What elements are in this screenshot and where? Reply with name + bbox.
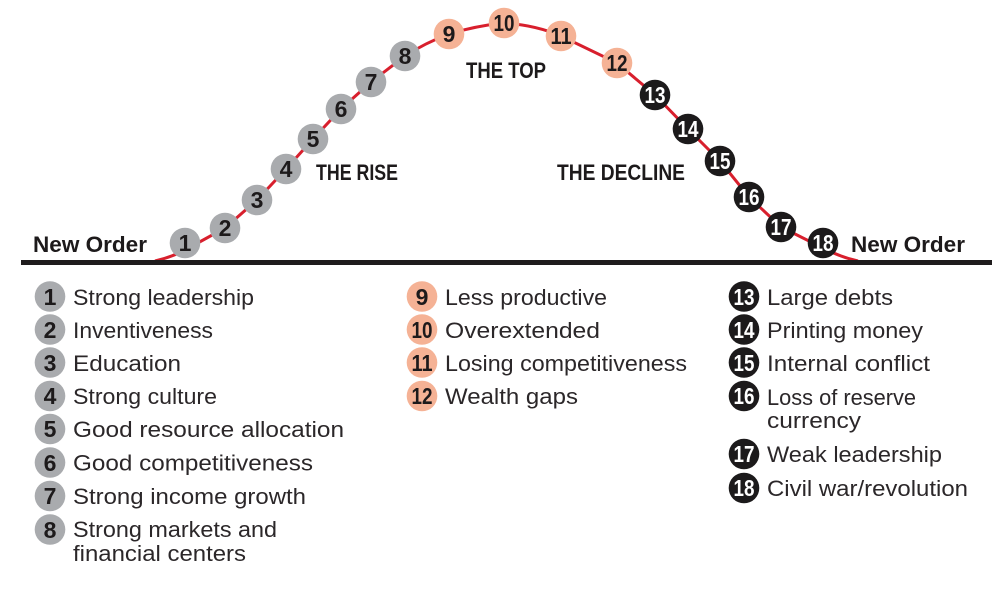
legend item 14	[729, 314, 923, 345]
curve marker 2: 2	[219, 215, 231, 241]
curve marker 13: 13	[644, 82, 666, 108]
legend item 18: 18	[734, 475, 755, 501]
legend item 10: 10	[412, 317, 432, 343]
legend item 15	[729, 347, 930, 378]
legend item 7: 7	[44, 483, 56, 509]
curve marker 6	[326, 94, 356, 124]
legend item 11: Losing competitiveness	[445, 351, 687, 376]
legend item 5: Good resource allocation	[73, 417, 344, 442]
legend item 3	[35, 347, 181, 378]
legend item 2: Inventiveness	[73, 318, 213, 343]
legend item 9	[407, 281, 607, 312]
curve	[155, 23, 858, 261]
curve marker 3: 3	[251, 187, 263, 213]
label: new order right: New Order	[851, 232, 965, 257]
legend item 15: 15	[734, 350, 755, 376]
legend item 14: Printing money	[767, 318, 923, 343]
legend item 10	[407, 314, 600, 345]
panel: cycle chart	[21, 8, 992, 265]
label: the top: THE TOP	[466, 58, 546, 83]
legend item 18: Civil war/revolution	[767, 476, 968, 501]
legend item 3: Education	[73, 351, 181, 376]
legend item 5	[35, 414, 344, 444]
curve marker 5	[298, 124, 328, 154]
legend item 7: Strong income growth	[73, 484, 306, 509]
label: the rise: THE RISE	[316, 160, 398, 185]
curve marker 15: 15	[710, 148, 731, 174]
curve marker 8: 8	[399, 43, 412, 69]
legend item 1: Strong leadership	[73, 285, 254, 310]
panel: top legend	[407, 281, 687, 411]
legend item 13: 13	[734, 284, 754, 310]
legend item 6	[35, 447, 313, 478]
legend item 6: Good competitiveness	[73, 450, 313, 476]
legend item 8: Strong markets and	[73, 517, 277, 542]
legend item 9: 9	[416, 284, 428, 310]
legend item 10: Overextended	[445, 318, 600, 343]
legend item 9: Less productive	[445, 285, 607, 310]
curve marker 9	[434, 19, 464, 49]
curve marker 5: 5	[307, 126, 320, 152]
legend item 4: Strong culture	[73, 384, 217, 409]
label: new order left: New Order	[33, 232, 147, 257]
curve marker 4: 4	[280, 156, 293, 182]
legend item 8: financial centers	[73, 541, 246, 566]
legend item 12: Wealth gaps	[445, 384, 578, 409]
legend item 16	[729, 381, 916, 433]
legend item 8	[35, 514, 277, 566]
curve marker 1: 1	[179, 230, 192, 256]
legend item 17	[729, 439, 942, 469]
legend item 12: 12	[412, 383, 432, 409]
curve marker 7: 7	[365, 69, 377, 95]
curve marker 3	[242, 185, 272, 215]
legend item 18	[729, 473, 968, 503]
label: the decline: THE DECLINE	[557, 160, 685, 185]
curve marker 16: 16	[738, 184, 760, 210]
legend item 1	[35, 281, 254, 312]
legend item 17: Weak leadership	[767, 442, 942, 467]
curve marker 1	[170, 228, 200, 258]
legend item 7	[35, 481, 306, 511]
curve marker 8	[390, 41, 420, 71]
legend item 4	[35, 381, 217, 411]
curve marker 14: 14	[678, 116, 699, 142]
legend item 2	[35, 314, 213, 345]
legend item 5: 5	[44, 416, 57, 442]
curve marker 6: 6	[335, 96, 347, 122]
baseline	[21, 260, 992, 265]
curve marker 18: 18	[812, 230, 834, 256]
curve marker 4	[271, 154, 301, 184]
legend item 16: currency	[767, 408, 861, 433]
legend item 17: 17	[734, 441, 754, 467]
legend item 16: 16	[734, 383, 754, 409]
curve marker 11	[546, 21, 576, 51]
legend item 2: 2	[44, 317, 56, 343]
legend item 1: 1	[44, 284, 57, 310]
curve marker 7	[356, 67, 386, 97]
legend item 14: 14	[734, 317, 755, 343]
legend item 16: Loss of reserve	[767, 385, 916, 410]
panel: decline legend	[729, 281, 968, 503]
legend item 8: 8	[44, 517, 57, 543]
legend item 13: Large debts	[767, 285, 893, 310]
curve marker 11: 11	[550, 23, 572, 49]
legend item 3: 3	[44, 350, 56, 376]
panel: rise legend	[35, 281, 344, 566]
curve marker 2	[210, 213, 240, 243]
legend item 12	[407, 381, 578, 411]
legend item 6: 6	[44, 450, 56, 476]
legend item 11	[407, 347, 687, 378]
legend item 4: 4	[44, 383, 57, 409]
curve marker 10: 10	[494, 10, 514, 36]
legend item 15: Internal conflict	[767, 351, 930, 376]
curve marker 12: 12	[606, 50, 628, 76]
curve marker 17: 17	[770, 214, 792, 240]
curve marker 9: 9	[443, 21, 455, 47]
legend item 11: 11	[412, 350, 433, 376]
legend item 13	[729, 281, 893, 312]
